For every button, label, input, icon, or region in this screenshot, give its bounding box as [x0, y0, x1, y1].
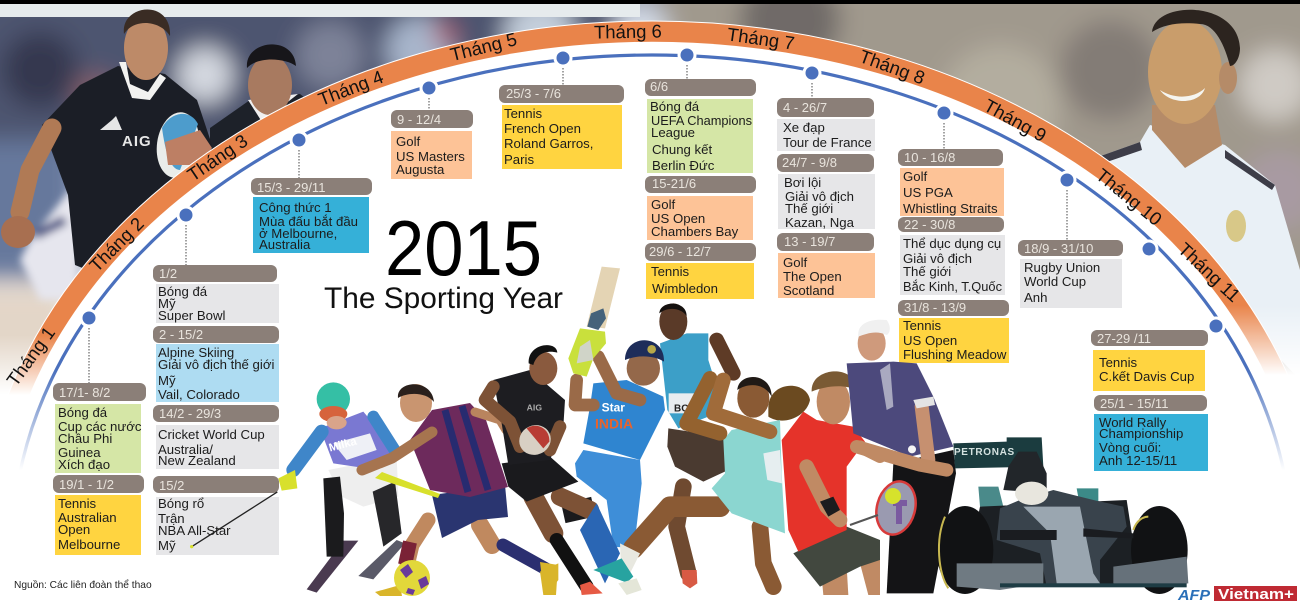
rugby player, lead, background left: AIG	[122, 133, 152, 150]
player behind: blurred white and blue figure	[20, 190, 85, 300]
event: African Cup of Nations: Cup các nước	[58, 419, 142, 434]
event: Formula 1: 15/3 - 29/11	[257, 180, 325, 195]
event: US Masters: Augusta	[396, 162, 445, 177]
logo: AFP: AFP	[1177, 588, 1210, 604]
event: Swimming Championships: Giải vô địch	[785, 189, 854, 204]
event: Gymnastics Championships: 22 - 30/8	[904, 217, 955, 232]
event: Alpine Skiing: Vail, Colorado	[158, 387, 240, 402]
event: Davis Cup: C.kết Davis Cup	[1099, 369, 1194, 384]
event: US Masters	[391, 110, 473, 179]
event: NBA All-Star: Trận	[158, 511, 185, 526]
event: World Rally Championship: Championship	[1099, 426, 1183, 441]
event: US Open tennis	[898, 300, 1009, 363]
event: African Cup of Nations	[53, 383, 146, 473]
F1 racing car	[937, 437, 1188, 594]
tennis player male	[782, 371, 880, 595]
event: Cricket World Cup: 14/2 - 29/3	[159, 406, 221, 421]
event: Australian Open: Tennis	[58, 496, 97, 511]
tennis racket and ball	[850, 477, 921, 539]
event: Tour de France	[777, 98, 875, 151]
event: Gymnastics Championships: Giải vô địch	[903, 251, 972, 266]
Ronaldo, background right	[1095, 10, 1300, 380]
event: Cricket World Cup: Australia/	[158, 442, 213, 457]
event: French Open: Roland Garros,	[504, 136, 593, 151]
event: French Open: Tennis	[504, 106, 543, 121]
event: African Cup of Nations: Châu Phi	[58, 431, 112, 446]
sprinter	[659, 303, 733, 588]
event: US Open golf: 15-21/6	[652, 176, 696, 191]
event: Cricket World Cup: New Zealand	[158, 453, 236, 468]
month labels on arc: Tháng 11	[1174, 238, 1245, 306]
event: US Open golf: Golf	[651, 197, 676, 212]
event: Super Bowl	[153, 265, 279, 323]
event: Alpine Skiing: Giải vô địch thế giới	[158, 357, 274, 372]
event: NBA All-Star	[153, 476, 279, 555]
event: Super Bowl: Bóng đá	[158, 284, 208, 299]
event: Gymnastics Championships: Bắc Kinh, T.Quốc	[903, 279, 1002, 294]
event: Alpine Skiing	[153, 326, 279, 402]
event: US PGA: 10 - 16/8	[904, 150, 955, 165]
event: Rugby World Cup: Anh	[1024, 290, 1047, 305]
rugby player, lead, background left	[1, 9, 212, 275]
event: World Rally Championship	[1094, 395, 1208, 471]
event: The Open: 13 - 19/7	[784, 234, 835, 249]
event: Swimming Championships: Bơi lội	[784, 175, 821, 190]
event: Gymnastics Championships: Thể dục dụng cụ	[903, 236, 1001, 251]
football boot at rugby left	[540, 563, 558, 595]
event: NBA All-Star: Bóng rổ	[158, 496, 204, 511]
month labels on arc: Tháng 6	[594, 20, 662, 43]
event: Formula 1: Công thức 1	[259, 200, 332, 215]
event: US Masters: US Masters	[396, 149, 465, 164]
event: Rugby World Cup: 18/9 - 31/10	[1024, 241, 1093, 256]
event: US Open golf: US Open	[651, 211, 705, 226]
event: US PGA: Golf	[903, 169, 928, 184]
month labels on arc: Tháng 7	[726, 23, 796, 54]
event: US Masters: Golf	[396, 134, 421, 149]
event: World Rally Championship: Vòng cuối:	[1099, 440, 1161, 455]
event: US Open tennis: 31/8 - 13/9	[904, 300, 966, 315]
background photo: stadium crowd and players	[0, 0, 1300, 400]
event: Alpine Skiing: 2 - 15/2	[159, 327, 203, 342]
event: Cricket World Cup	[153, 405, 279, 469]
event: Tour de France: 4 - 26/7	[783, 100, 827, 115]
event: The Open	[777, 233, 875, 298]
source note: Nguồn: Các liên đoàn thể thao	[14, 579, 152, 591]
right white base	[1205, 375, 1300, 604]
month labels on arc: Tháng 10	[1092, 164, 1166, 230]
event: Davis Cup: Tennis	[1099, 355, 1138, 370]
event: Rugby World Cup	[1018, 240, 1123, 308]
event: Wimbledon: Tennis	[651, 264, 690, 279]
event: Australian Open: Australian	[58, 510, 117, 525]
event: NBA All-Star: Mỹ	[158, 538, 176, 553]
rugby player, second, background left	[210, 44, 304, 150]
event: Champions League: Chung kết	[652, 142, 712, 157]
event: Formula 1: Mùa đấu bắt đầu	[259, 214, 358, 229]
cricketer	[568, 267, 665, 583]
title	[324, 204, 563, 315]
event: US Open tennis: Flushing Meadow	[903, 347, 1007, 362]
event: African Cup of Nations: 17/1- 8/2	[59, 385, 110, 400]
event: African Cup of Nations: Bóng đá	[58, 405, 108, 420]
rugby player: AIG	[527, 403, 542, 413]
athletes: rugby, cricket, sprinter, tennis	[485, 267, 880, 595]
cricketer: INDIA	[595, 415, 633, 431]
title: The Sporting Year	[324, 282, 563, 315]
event: Swimming Championships: 24/7 - 9/8	[782, 155, 837, 170]
event: Tour de France: Xe đạp	[783, 120, 825, 135]
event: US Open tennis: US Open	[903, 333, 957, 348]
event: Champions League: UEFA Champions	[651, 113, 752, 128]
event: Champions League	[645, 79, 756, 173]
event: Champions League: League	[651, 125, 695, 140]
top black bar	[0, 0, 1300, 4]
event: Formula 1: Australia	[259, 237, 311, 252]
event: World Rally Championship: 25/1 - 15/11	[1100, 396, 1168, 411]
event: Australian Open: Open	[58, 522, 90, 537]
event: US Open golf: Chambers Bay	[651, 224, 739, 239]
event: US Open golf	[645, 176, 756, 240]
event: US Open tennis: Tennis	[903, 318, 942, 333]
event: The Open: Scotland	[783, 283, 834, 298]
tennis player female	[593, 377, 810, 595]
logo: Vietnam+: Vietnam+	[1218, 587, 1294, 603]
event: World Rally Championship: World Rally	[1099, 415, 1167, 430]
title: 2015	[385, 204, 542, 292]
event: US PGA: US PGA	[903, 185, 953, 200]
event: Australian Open: Melbourne	[58, 537, 120, 552]
month labels on arc	[2, 20, 1245, 390]
event: Rugby World Cup: Rugby Union	[1024, 260, 1100, 275]
event: Formula 1: ở Melbourne,	[259, 226, 337, 241]
event: Wimbledon: Wimbledon	[652, 281, 718, 296]
month labels on arc: Tháng 2	[85, 213, 148, 276]
event: NBA All-Star: NBA All-Star	[158, 523, 231, 538]
athlete: skier	[190, 382, 405, 593]
event: Swimming Championships: Thế giới	[785, 201, 833, 216]
event: French Open: Paris	[504, 152, 534, 167]
event: Champions League: 6/6	[650, 79, 668, 94]
event: French Open: French Open	[504, 121, 581, 136]
month labels on arc: Tháng 4	[315, 66, 386, 110]
event: Champions League: Bóng đá	[650, 99, 700, 114]
event: Alpine Skiing: Mỹ	[158, 373, 176, 388]
month labels on arc: Tháng 9	[980, 95, 1050, 146]
event: Australian Open: 19/1 - 1/2	[59, 477, 114, 492]
event: African Cup of Nations: Xích đạo	[58, 457, 110, 472]
month labels on arc: Tháng 1	[2, 323, 59, 390]
month labels on arc: Tháng 5	[448, 28, 519, 65]
event: NBA All-Star: 15/2	[159, 478, 184, 493]
event: Super Bowl: Super Bowl	[158, 308, 226, 323]
event: Swimming Championships: Kazan, Nga	[785, 215, 855, 230]
event: Super Bowl: Mỹ	[158, 296, 176, 311]
sprinter: BO	[674, 404, 689, 415]
event: Rugby World Cup: World Cup	[1024, 274, 1086, 289]
month labels on arc: Tháng 8	[857, 45, 928, 88]
event: Wimbledon	[645, 243, 756, 299]
right fade of band to white	[1205, 305, 1300, 375]
event: Champions League: Berlin Đức	[652, 158, 715, 173]
event: The Open: The Open	[783, 269, 842, 284]
left fade of band to white	[0, 335, 100, 395]
event: Australian Open	[53, 475, 144, 555]
athlete: football player	[362, 384, 558, 596]
event: Cricket World Cup: Cricket World Cup	[158, 427, 265, 442]
event: African Cup of Nations: Guinea	[58, 445, 101, 460]
event: Alpine Skiing: Alpine Skiing	[158, 345, 234, 360]
event: US PGA	[898, 149, 1004, 216]
left white base	[0, 395, 100, 604]
event: The Open: Golf	[783, 255, 808, 270]
event: Davis Cup: 27-29 /11	[1097, 331, 1151, 346]
event: Swimming Championships	[777, 154, 875, 230]
event: Super Bowl: 1/2	[159, 266, 177, 281]
event: Davis Cup	[1091, 330, 1208, 391]
event: US Masters: 9 - 12/4	[397, 112, 441, 127]
rugby player	[485, 345, 603, 595]
event: Formula 1	[251, 178, 372, 253]
event: French Open: 25/3 - 7/6	[506, 86, 561, 101]
event: Tour de France: Tour de France	[783, 135, 872, 150]
event: Wimbledon: 29/6 - 12/7	[649, 244, 711, 259]
event: Gymnastics Championships: Thế giới	[903, 264, 951, 279]
month labels on arc: Tháng 3	[183, 130, 251, 185]
cricketer: Star	[602, 401, 625, 415]
athlete: skier: Milka	[328, 435, 359, 455]
event: World Rally Championship: Anh 12-15/11	[1099, 453, 1177, 468]
event: Gymnastics Championships	[898, 217, 1005, 295]
athlete: golfer	[847, 320, 956, 593]
event: US PGA: Whistling Straits	[903, 201, 998, 216]
F1 racing car: PETRONAS	[954, 447, 1015, 458]
event: French Open	[499, 85, 624, 169]
